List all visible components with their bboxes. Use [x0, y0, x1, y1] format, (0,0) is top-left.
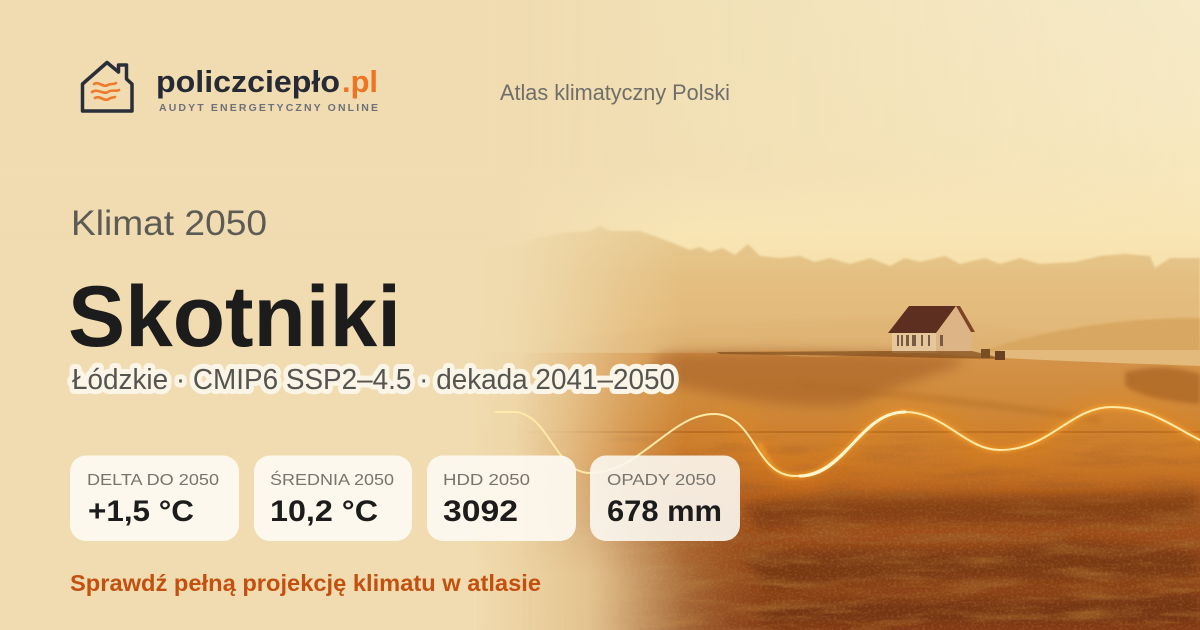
stat card: delta: DELTA DO 2050 — [87, 472, 219, 489]
stat card: precipitation — [590, 456, 740, 541]
title: Skotniki: Skotniki — [68, 269, 401, 365]
logo wordmark: policzciepło — [156, 64, 340, 99]
header: atlas label: Atlas klimatyczny Polski — [500, 80, 730, 105]
stat card: average: 10,2 °C — [270, 495, 378, 528]
field — [0, 351, 1200, 630]
bottom-left fade overlay — [526, 488, 742, 630]
stat card: precipitation: 678 mm — [607, 495, 722, 528]
glowing wave line — [495, 407, 1200, 476]
subtitle with white halo: Łódzkie · CMIP6 SSP2–4.5 · dekada 2041–2050 — [72, 364, 675, 396]
stat card: average: ŚREDNIA 2050 — [270, 470, 394, 489]
stat card: average — [254, 456, 412, 541]
house on the hill — [716, 306, 1005, 360]
icon: house with heat waves — [82, 62, 132, 111]
stat card: HDD — [427, 456, 576, 541]
stat card: precipitation: OPADY 2050 — [607, 472, 716, 489]
logo: .pl — [342, 64, 378, 99]
background photo: landscape at sunset — [508, 0, 1200, 630]
top fade overlay — [571, 0, 976, 179]
stat card: HDD: 3092 — [443, 495, 518, 528]
stat card: delta: +1,5 °C — [88, 495, 194, 528]
eyebrow: Klimat 2050: Klimat 2050 — [71, 204, 267, 243]
stat card: delta — [70, 456, 239, 541]
stat card: HDD: HDD 2050 — [443, 472, 530, 489]
dark furrows in the foreground — [740, 490, 1200, 622]
call to action: Sprawdź pełną projekcję klimatu w atlasie — [70, 570, 541, 596]
logo tagline: AUDYT ENERGETYCZNY ONLINE — [159, 102, 378, 114]
logo — [82, 62, 378, 114]
